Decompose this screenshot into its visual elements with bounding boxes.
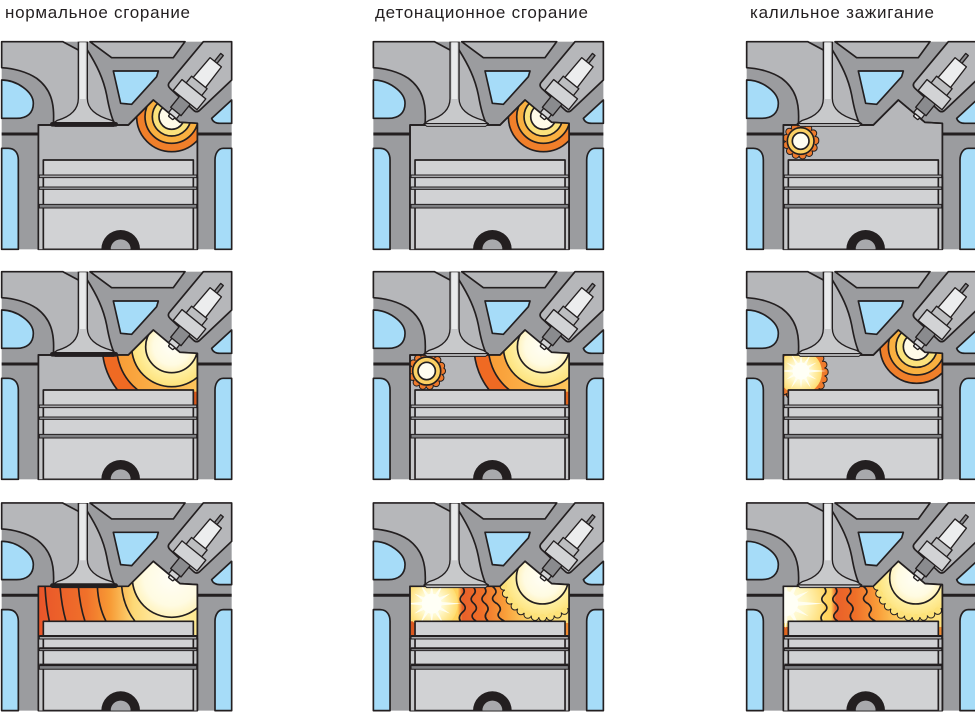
piston, valve and spark plug xyxy=(410,42,606,249)
valve seat xyxy=(52,123,116,125)
engine cross-section xyxy=(373,503,603,711)
flame front from spark plug xyxy=(136,101,196,152)
panel: pre-ignition, stage 2 xyxy=(747,272,975,479)
piston rings emphasis xyxy=(784,636,942,665)
valve seat xyxy=(52,585,116,587)
panel: detonation, stage 3 xyxy=(373,503,606,711)
piston, valve and spark plug xyxy=(783,272,975,479)
title: нормальное сгорание: нормальное сгорание xyxy=(5,3,190,22)
piston, valve and spark plug xyxy=(783,503,975,711)
piston, valve and spark plug xyxy=(38,42,234,249)
detonation wave and flash xyxy=(784,562,942,636)
engine cross-section xyxy=(373,272,603,479)
engine cross-section xyxy=(747,503,975,711)
piston, valve and spark plug xyxy=(38,503,234,711)
piston rings emphasis xyxy=(411,636,568,665)
engine cross-section xyxy=(747,42,975,249)
piston, valve and spark plug xyxy=(38,272,234,479)
panel: pre-ignition, stage 3 xyxy=(747,503,975,711)
main flame and self-ignition spot xyxy=(410,331,568,404)
flame filling the chamber xyxy=(39,562,197,636)
panel: pre-ignition, stage 1 xyxy=(747,42,975,249)
expanding flame front xyxy=(102,331,196,404)
title: калильное зажигание: калильное зажигание xyxy=(750,3,934,22)
panel: normal combustion, stage 2 xyxy=(2,272,241,479)
detonation wave and flash xyxy=(410,562,568,636)
panel: detonation, stage 2 xyxy=(373,272,613,479)
engine cross-section xyxy=(2,42,232,249)
panel: normal combustion, stage 1 xyxy=(2,42,234,249)
title: детонационное сгорание: детонационное сгорание xyxy=(375,3,588,22)
panel: detonation, stage 1 xyxy=(373,42,606,249)
glowing ignition spot xyxy=(786,126,815,156)
piston rings emphasis xyxy=(39,636,197,665)
engine cross-section xyxy=(747,272,975,479)
pre-ignition flash and spark flame xyxy=(784,331,942,398)
piston, valve and spark plug xyxy=(783,42,975,249)
engine cross-section xyxy=(373,42,603,249)
engine cross-section xyxy=(2,272,232,479)
flame front from spark plug xyxy=(508,101,568,152)
piston, valve and spark plug xyxy=(410,503,606,711)
engine cross-section xyxy=(2,503,232,711)
valve seat xyxy=(52,353,116,355)
panel: normal combustion, stage 3 xyxy=(2,503,234,711)
piston, valve and spark plug xyxy=(410,272,606,479)
